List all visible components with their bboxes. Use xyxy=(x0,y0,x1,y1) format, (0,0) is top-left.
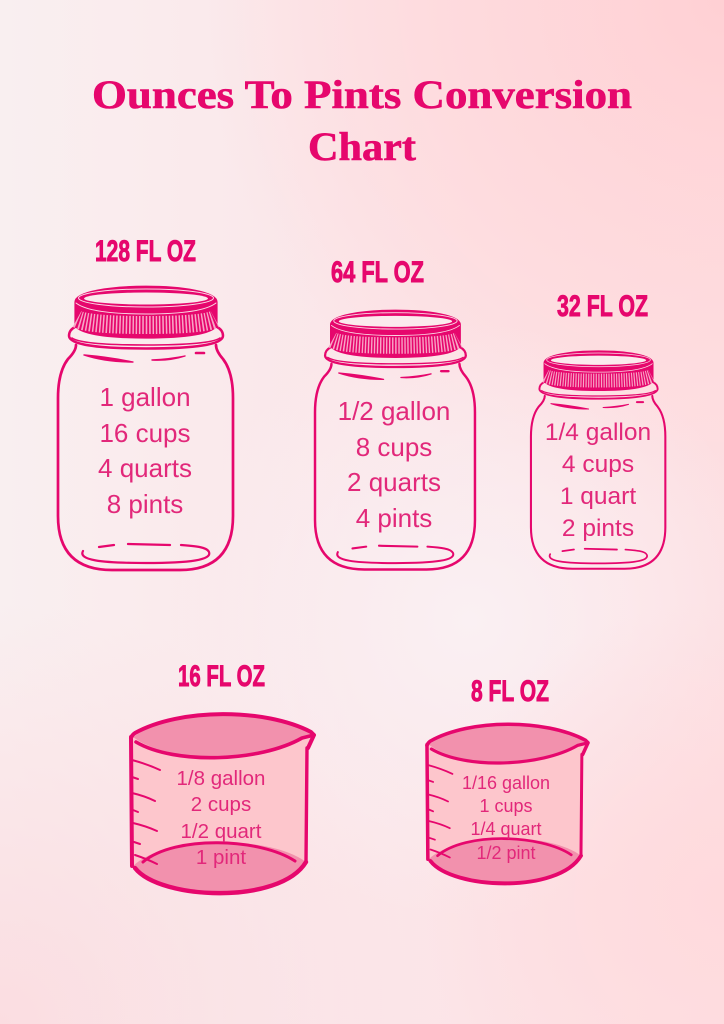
text: 8 fl oz equivalents: 1/4 quart xyxy=(470,819,542,839)
panel: 32 fl oz jar xyxy=(531,290,665,569)
heading: 8 fl oz: 8 FL OZ xyxy=(471,675,549,708)
text: 128 fl oz equivalents: 8 pints xyxy=(107,489,183,519)
text: 128 fl oz equivalents xyxy=(98,382,192,519)
text: 128 fl oz equivalents: 1 gallon xyxy=(99,382,191,412)
panel: 64 fl oz jar xyxy=(315,256,475,569)
text: 64 fl oz equivalents: 4 pints xyxy=(356,503,432,533)
text: 32 fl oz equivalents: 1 quart xyxy=(560,483,636,510)
text: 64 fl oz equivalents xyxy=(338,396,450,533)
text: 64 fl oz equivalents: 2 quarts xyxy=(347,467,441,497)
icon: large measuring cup xyxy=(131,714,314,893)
icon: medium mason jar xyxy=(315,310,475,569)
text: 32 fl oz equivalents: 4 cups xyxy=(562,451,634,478)
title xyxy=(92,72,632,169)
icon: small mason jar xyxy=(531,351,665,569)
text: 32 fl oz equivalents: 2 pints xyxy=(562,515,634,542)
text: 128 fl oz equivalents: 16 cups xyxy=(99,418,191,448)
heading: 32 fl oz: 32 FL OZ xyxy=(557,290,648,323)
text: 16 fl oz equivalents xyxy=(177,767,265,869)
text: 8 fl oz equivalents: 1 cups xyxy=(479,796,533,816)
text: 16 fl oz equivalents: 2 cups xyxy=(191,793,251,816)
icon: small measuring cup xyxy=(427,724,588,883)
text: 64 fl oz equivalents: 8 cups xyxy=(356,432,432,462)
title: Ounces To Pints Conversion xyxy=(92,72,632,117)
text: 16 fl oz equivalents: 1/2 quart xyxy=(181,820,262,843)
text: 8 fl oz equivalents: 1/2 pint xyxy=(476,843,536,863)
text: 16 fl oz equivalents: 1/8 gallon xyxy=(177,767,265,790)
title: Chart xyxy=(308,124,417,169)
text: 32 fl oz equivalents: 1/4 gallon xyxy=(545,419,651,446)
text: 32 fl oz equivalents xyxy=(545,419,651,542)
text: 8 fl oz equivalents: 1/16 gallon xyxy=(462,773,550,793)
text: 8 fl oz equivalents xyxy=(462,773,550,863)
panel: 128 fl oz jar xyxy=(58,235,233,570)
icon: large mason jar xyxy=(58,286,233,570)
text: 16 fl oz equivalents: 1 pint xyxy=(196,846,246,869)
heading: 16 fl oz: 16 FL OZ xyxy=(178,660,265,693)
panel: 16 fl oz cup xyxy=(131,660,314,893)
text: 128 fl oz equivalents: 4 quarts xyxy=(98,453,192,483)
heading: 64 fl oz: 64 FL OZ xyxy=(331,256,424,289)
heading: 128 fl oz: 128 FL OZ xyxy=(95,235,196,268)
text: 64 fl oz equivalents: 1/2 gallon xyxy=(338,396,450,426)
panel: 8 fl oz cup xyxy=(427,675,588,883)
